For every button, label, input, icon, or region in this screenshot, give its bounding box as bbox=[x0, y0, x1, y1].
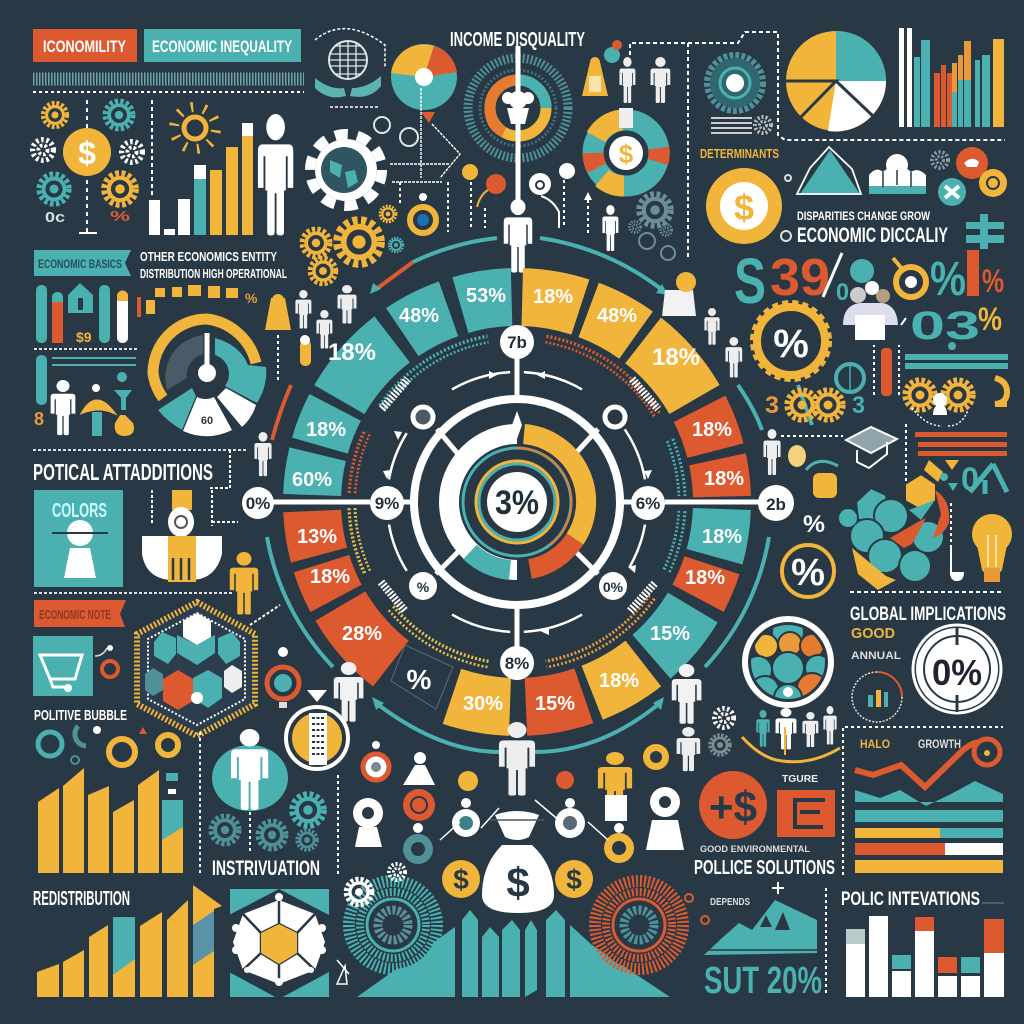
icon: orange plus dollar: +$ bbox=[709, 783, 757, 832]
bar chart: bottom right bbox=[846, 916, 1004, 997]
panel: banner with two-line text bbox=[34, 249, 287, 306]
bar chart: yellow bars left bbox=[38, 768, 183, 873]
text block: policy solutions: GOOD ENVIRONMENTAL bbox=[700, 844, 811, 854]
segment labels: 15% bbox=[650, 623, 690, 645]
icon: money bag bbox=[482, 811, 554, 913]
bar chart: top-left with person bbox=[149, 105, 293, 235]
icon group: small coloured badges bbox=[932, 147, 1007, 206]
segment labels: 18% bbox=[306, 419, 346, 441]
icon group: group of people with yellow arc bbox=[742, 706, 840, 762]
bar chart: rising yellow bars with arrow bbox=[37, 885, 222, 997]
icon: orange ring bbox=[267, 647, 299, 708]
segment labels: 30% bbox=[463, 693, 503, 715]
text block: economic disparity: ECONOMIC DICCALIY bbox=[797, 224, 948, 247]
panel: teal colours card: COLORS bbox=[52, 500, 107, 522]
icon: percent ring bbox=[782, 545, 834, 597]
icon: large dollar coin bbox=[706, 168, 782, 244]
icon group: coins: $ bbox=[453, 864, 469, 895]
panel: cart card bbox=[33, 636, 127, 724]
icon group: cap, gears and ribbons: 3 bbox=[765, 392, 779, 419]
panel: hexagon network bbox=[229, 889, 329, 999]
icon: group at laptop bbox=[843, 281, 906, 340]
icon group: pins above ring bbox=[462, 163, 618, 251]
segment labels bbox=[292, 285, 744, 715]
text block: global implications bbox=[850, 592, 1006, 662]
icon group: coin with gears: 0c bbox=[45, 209, 65, 226]
donut: dollar wheel bbox=[593, 108, 659, 186]
white rings bbox=[414, 399, 620, 605]
divider with red banner bbox=[34, 593, 232, 627]
line and bar chart panel: HALO bbox=[860, 737, 890, 751]
segment labels: 48% bbox=[597, 305, 637, 327]
panel: banner with two-line text: ECONOMIC BASICS bbox=[38, 257, 122, 271]
segment labels: 28% bbox=[342, 623, 382, 645]
gauge chart: 60 bbox=[201, 415, 213, 427]
icon group: columns and house bbox=[34, 283, 155, 349]
panel: banner with two-line text: DISTRIBUTION HIGH OPERATIONAL bbox=[140, 266, 287, 281]
icon group: lower right of percent gear bbox=[798, 342, 1008, 426]
icon group: columns and house: $9 bbox=[76, 329, 92, 345]
pie chart: top right bbox=[786, 31, 886, 132]
heading: determinants: DETERMINANTS bbox=[700, 146, 779, 161]
icon: house on mountain with stat: SUT 20% bbox=[704, 960, 822, 1002]
icon: teal mandala bbox=[337, 864, 437, 984]
node labels: 9% bbox=[375, 494, 399, 513]
stat: large percentage row: 03 bbox=[910, 304, 980, 348]
gauge chart bbox=[153, 319, 266, 436]
icon: person on teal blob bbox=[212, 729, 288, 811]
node labels: % bbox=[417, 579, 430, 595]
icon: white-yellow pedestal bbox=[142, 490, 238, 582]
icon: percent text: % bbox=[803, 511, 825, 538]
stat: large percentage row: 39 bbox=[770, 249, 830, 307]
donut: top centre concentric ring bbox=[468, 46, 568, 215]
centre value bbox=[487, 472, 547, 532]
icon: red mandala bbox=[595, 881, 709, 969]
teal arcs with arrows bbox=[267, 238, 769, 752]
text block: global implications: GOOD bbox=[851, 625, 895, 642]
node labels: 2b bbox=[766, 495, 786, 514]
node circles bbox=[242, 325, 794, 680]
segment labels: 18% bbox=[599, 670, 639, 692]
line and bar chart panel bbox=[843, 727, 1003, 875]
panel: banner with two-line text: OTHER ECONOMICS ENTITY bbox=[140, 249, 277, 264]
panel: banner with two-line text: % bbox=[245, 290, 258, 306]
icon: domes bbox=[869, 154, 926, 194]
stat: large percentage row: % bbox=[930, 253, 966, 306]
icon: percent ring: % bbox=[791, 552, 825, 594]
icon: zero percent ring: 0% bbox=[932, 652, 982, 693]
panel: top-left banners: ICONOMILITY bbox=[43, 37, 126, 56]
segment labels: 53% bbox=[466, 285, 506, 307]
segment labels: 15% bbox=[535, 693, 575, 715]
icon group: persons around central ring bbox=[230, 272, 742, 724]
stat: large percentage row: S bbox=[734, 245, 766, 317]
segment labels: 18% bbox=[328, 339, 376, 366]
icon group: policy bubbles bbox=[38, 726, 178, 765]
diagonal ring nodes bbox=[413, 407, 433, 427]
icon: small ring bars bbox=[852, 672, 902, 722]
outer segmented ring: percent segments bbox=[229, 214, 805, 790]
icon: red lines bbox=[915, 432, 1007, 497]
divider with red banner: ECONOMIC NOTE bbox=[39, 607, 111, 622]
segment labels: 48% bbox=[399, 305, 439, 327]
icon: globe in hands bbox=[315, 29, 385, 107]
heading: public interventions: POLIC INTEVATIONS bbox=[841, 889, 980, 910]
icon: orange plus dollar bbox=[699, 771, 835, 839]
central diagram bbox=[229, 214, 805, 790]
heading: redistribution: REDISTRIBUTION bbox=[33, 888, 130, 910]
icon: large dollar coin: $ bbox=[734, 187, 754, 228]
segment labels: 60% bbox=[292, 469, 332, 491]
icon: ring with building bbox=[286, 690, 348, 769]
icon group: small teal outline spirals bbox=[629, 194, 675, 260]
icon group: coin with gears bbox=[33, 100, 152, 233]
title: income disquality: INCOME DISQUALITY bbox=[450, 29, 585, 51]
icon: central top person bbox=[504, 199, 532, 273]
icon: orange plus dollar: TGURE bbox=[782, 774, 818, 785]
dashed connector: top right bbox=[630, 32, 1005, 258]
icon: percent gear: % bbox=[773, 322, 809, 366]
node labels: 0% bbox=[246, 494, 270, 513]
heading: political attributions: POTICAL ATTADDITIONS bbox=[33, 459, 213, 485]
icon group: coin with gears: % bbox=[110, 208, 130, 225]
tags bbox=[381, 379, 658, 611]
node labels: 0% bbox=[603, 579, 624, 595]
dashed rings bbox=[352, 339, 682, 664]
icon group: coins: $ bbox=[566, 864, 582, 895]
segment labels: 18% bbox=[310, 566, 350, 588]
text block: economic disparity: DISPARITIES CHANGE GROW bbox=[797, 209, 931, 223]
pie chart: top centre bbox=[374, 44, 460, 232]
segment labels: 18% bbox=[692, 419, 732, 441]
icon: house on mountain with stat bbox=[704, 882, 826, 1002]
icon group: small figures left bbox=[34, 355, 136, 436]
icon: teal connector symbol bbox=[966, 214, 1004, 249]
stat: large percentage row: 0 bbox=[836, 279, 849, 306]
text block: policy solutions: POLLICE SOLUTIONS bbox=[694, 857, 835, 879]
icon: teal skyline bbox=[357, 910, 670, 997]
icon group: cap, gears and ribbons bbox=[763, 390, 906, 498]
panel: top-left banners bbox=[33, 29, 304, 92]
segment labels: 18% bbox=[685, 567, 725, 589]
arrowheads bbox=[383, 371, 652, 635]
stat: large percentage row bbox=[734, 245, 1004, 348]
stat: large percentage row: % bbox=[978, 301, 1002, 337]
icon: house on mountain with stat: DEPENDS bbox=[710, 897, 750, 908]
segment labels: 18% bbox=[704, 468, 744, 490]
icon group: coins bbox=[442, 860, 593, 898]
percent box: % bbox=[407, 664, 432, 695]
centre value: 3% bbox=[495, 484, 539, 522]
icon: mosaic hexagon bbox=[137, 602, 280, 736]
node labels bbox=[246, 333, 786, 673]
icon group: small figures left: 8 bbox=[34, 409, 44, 429]
panel: cart card: POLITIVE BUBBLE bbox=[34, 707, 127, 724]
icon group: small teal gears bbox=[211, 794, 324, 852]
spokes bbox=[272, 358, 760, 650]
text block: economic disparity bbox=[781, 209, 948, 247]
node labels: 8% bbox=[505, 654, 529, 673]
stat: large percentage row: % bbox=[982, 263, 1004, 299]
icon: percent gear bbox=[753, 303, 829, 379]
node labels: 7b bbox=[507, 333, 527, 352]
segment labels: 13% bbox=[297, 526, 337, 548]
icon: zero percent ring bbox=[913, 625, 1001, 713]
icon group: top persons bbox=[582, 40, 670, 103]
percent box bbox=[391, 645, 453, 709]
icon: circled scallops bbox=[744, 616, 831, 712]
icon group: bottom network bbox=[353, 708, 734, 864]
arrow arcs bbox=[337, 322, 697, 682]
text block: policy solutions bbox=[694, 844, 835, 879]
bar chart: top right bbox=[899, 28, 1004, 127]
icon: large white gear bbox=[310, 134, 382, 206]
icon: red lines: 0 bbox=[961, 461, 979, 497]
icon: hexagon cluster bbox=[839, 474, 951, 590]
icon group: coin with gears: $ bbox=[78, 135, 96, 171]
heading: political attributions bbox=[33, 450, 248, 488]
icon group: yellow gears bbox=[302, 193, 436, 284]
donut: dollar wheel: $ bbox=[619, 139, 634, 169]
text block: global implications: ANNUAL bbox=[851, 650, 901, 662]
segment labels: 18% bbox=[702, 526, 742, 548]
panel: top-left banners: ECONOMIC INEQUALITY bbox=[152, 37, 292, 56]
icon: money bag: $ bbox=[506, 859, 530, 906]
dotted dividers bbox=[200, 732, 338, 875]
line and bar chart panel: GROWTH bbox=[918, 737, 961, 751]
segment labels: 18% bbox=[533, 286, 573, 308]
icon: teal cog with lines bbox=[707, 55, 771, 133]
icon: light bulb bbox=[950, 514, 1012, 582]
heading: instrivuation: INSTRIVUATION bbox=[212, 857, 320, 880]
node labels: 6% bbox=[636, 494, 660, 513]
icon group: cap, gears and ribbons: 3 bbox=[852, 392, 865, 419]
icon: mountain bbox=[785, 147, 861, 194]
panel: teal colours card bbox=[34, 490, 123, 587]
segment labels: 18% bbox=[652, 344, 700, 371]
